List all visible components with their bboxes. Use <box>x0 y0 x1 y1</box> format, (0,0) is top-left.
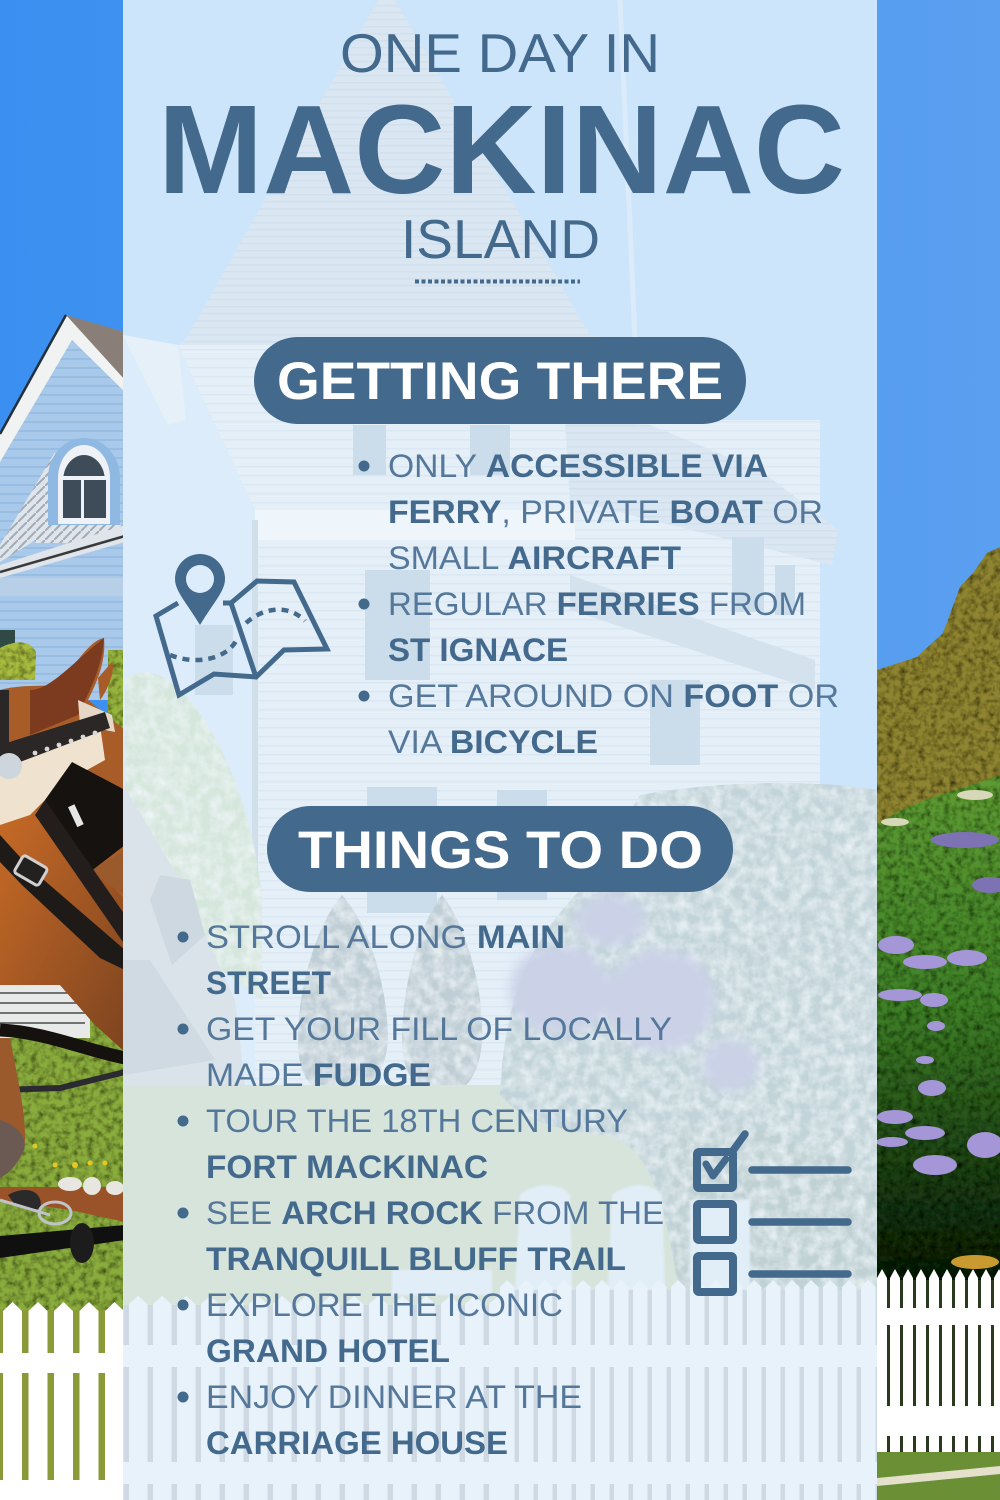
list: things to do: MADE FUDGE <box>206 1057 431 1093</box>
lawn and siding <box>0 983 125 1311</box>
title: ISLAND <box>401 208 600 270</box>
list: getting there: ST IGNACE <box>388 632 568 668</box>
heading: things to do: THINGS TO DO <box>298 821 703 880</box>
list: getting there <box>358 448 839 760</box>
horse <box>0 638 125 1263</box>
faded tower roof <box>180 0 640 345</box>
heading: getting there: GETTING THERE <box>277 352 723 411</box>
list: getting there: VIA BICYCLE <box>388 724 598 760</box>
heading: getting there <box>254 337 746 424</box>
icon: folded map with location pin <box>156 554 327 695</box>
faded house walls <box>123 335 877 1095</box>
faded picket fence <box>123 1280 877 1500</box>
faded flagpole <box>620 0 635 340</box>
list: things to do: GRAND HOTEL <box>206 1333 450 1369</box>
list: things to do <box>178 919 672 1461</box>
title: MACKINAC <box>158 79 845 220</box>
list: things to do: TRANQUILL BLUFF TRAIL <box>206 1241 626 1277</box>
faded adirondack chairs <box>392 1185 750 1295</box>
list: things to do: GET YOUR FILL OF LOCALLY <box>206 1011 672 1047</box>
list: things to do: CARRIAGE HOUSE <box>206 1425 508 1461</box>
right tree and lilac shrub <box>876 547 1000 1285</box>
list: things to do: TOUR THE 18TH CENTURY <box>206 1103 628 1139</box>
list: getting there: FERRY, PRIVATE BOAT OR <box>388 494 823 530</box>
title: ONE DAY IN <box>340 22 660 84</box>
icon: checklist <box>697 1134 848 1292</box>
list: things to do: SEE ARCH ROCK FROM THE <box>206 1195 664 1231</box>
translucent panel with faded photo <box>123 0 877 1500</box>
list: things to do: STREET <box>206 965 331 1001</box>
dotted divider <box>415 280 580 284</box>
fences and ground <box>0 1269 1000 1500</box>
faded trees and lilacs <box>123 672 877 1310</box>
list: things to do: EXPLORE THE ICONIC <box>206 1287 563 1323</box>
list: getting there: REGULAR FERRIES FROM <box>388 586 806 622</box>
title <box>158 22 845 270</box>
list: things to do: ENJOY DINNER AT THE <box>206 1379 582 1415</box>
list: getting there: SMALL AIRCRAFT <box>388 540 681 576</box>
list: things to do: FORT MACKINAC <box>206 1149 488 1185</box>
list: things to do: STROLL ALONG MAIN <box>206 919 565 955</box>
list: getting there: ONLY ACCESSIBLE VIA <box>388 448 768 484</box>
list: getting there: GET AROUND ON FOOT OR <box>388 678 839 714</box>
heading: things to do <box>267 806 733 892</box>
left gable house <box>0 315 125 740</box>
